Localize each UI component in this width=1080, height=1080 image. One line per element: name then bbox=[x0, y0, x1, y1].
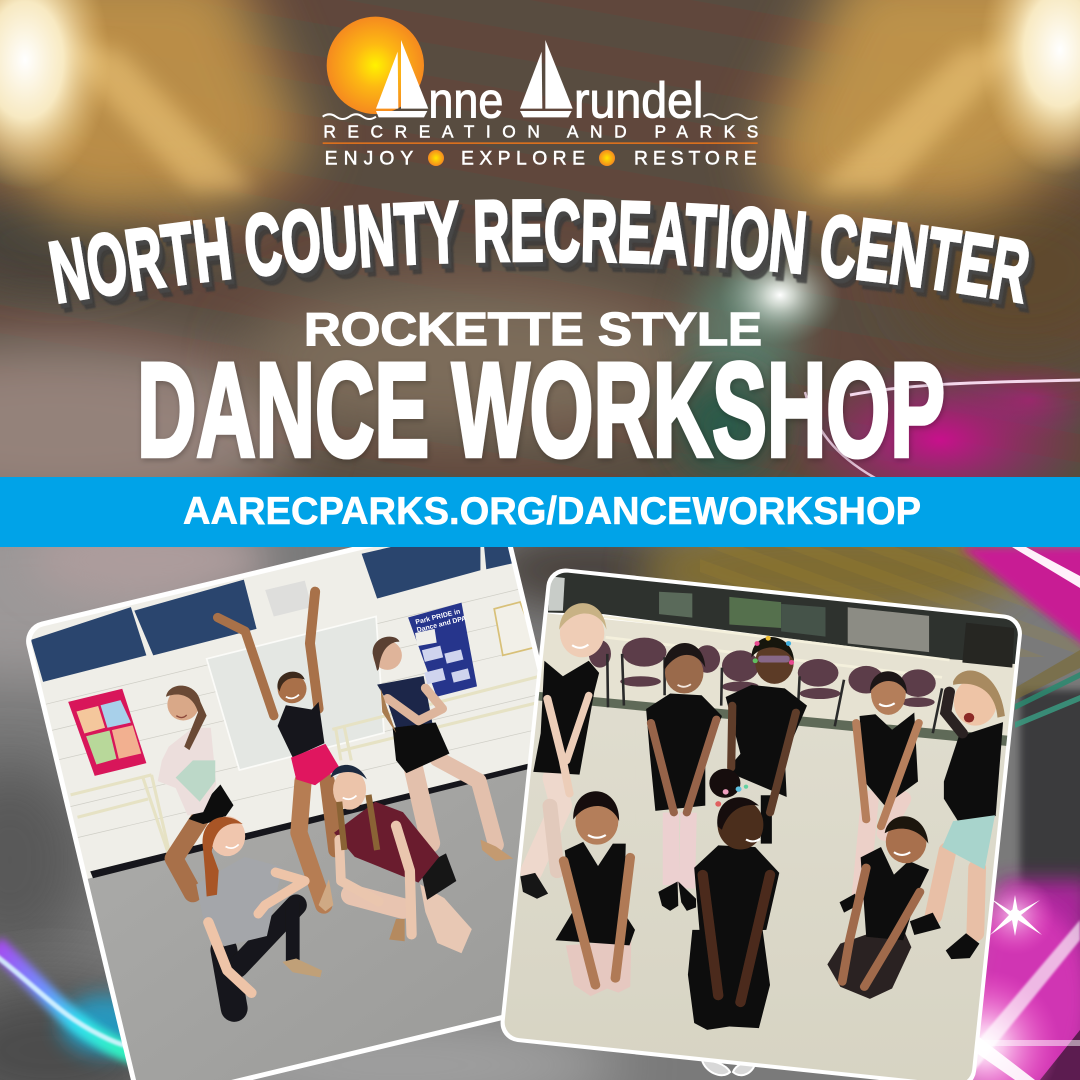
URL banner bbox=[0, 477, 1080, 547]
dancer: front left in grey shirt bbox=[196, 816, 322, 1008]
dancer: right in navy top bbox=[373, 637, 513, 861]
room floor bbox=[504, 692, 1006, 1080]
poster: formations bbox=[68, 689, 146, 776]
window band bbox=[548, 572, 1018, 664]
subheading: rockette style: ROCKETTE STYLE bbox=[304, 303, 762, 355]
background: upper stage lights bbox=[0, 0, 1080, 520]
cream wall bbox=[540, 614, 1015, 678]
logo waves bbox=[323, 114, 757, 119]
rainbow ray accent bbox=[1015, 650, 1080, 728]
logo tagline: EXPLORE bbox=[461, 149, 585, 170]
kid: second back row bbox=[646, 643, 722, 911]
logo tagline: RESTORE bbox=[634, 149, 757, 170]
kid: third back row with beads bbox=[726, 636, 807, 844]
logo subtitle: RECREATION AND PARKS bbox=[323, 121, 758, 141]
logo wordmark: nne bbox=[428, 72, 503, 128]
icon: rainbow light ribbon bbox=[0, 945, 150, 1058]
icon: lens flare bbox=[972, 920, 1080, 1080]
kid: front centre kneeling bbox=[688, 769, 779, 1030]
notice board bbox=[494, 602, 537, 655]
kid: front right kneeling bbox=[827, 816, 929, 999]
kid: front left kneeling bbox=[555, 791, 635, 996]
poster: park pride bbox=[408, 603, 477, 697]
icon: sparkle bbox=[990, 879, 1048, 948]
logo tagline: ENJOY bbox=[325, 149, 413, 170]
kid: blond at left bbox=[520, 603, 607, 899]
logo sailboat two bbox=[520, 40, 573, 117]
projector bbox=[265, 581, 312, 616]
background: lower stage lights bbox=[0, 500, 1080, 1080]
dancer: front right in maroon top bbox=[331, 765, 472, 953]
logo wordmark: rundel bbox=[574, 72, 703, 128]
navy acoustic panels bbox=[31, 547, 512, 682]
heading: centre name on an arc: NORTH COUNTY RECREATION CENTER bbox=[48, 198, 1036, 314]
logo: Anne Arundel Recreation and Parks bbox=[323, 17, 758, 170]
dancer: left in tie-dye top bbox=[158, 686, 234, 893]
logo sun bbox=[327, 17, 424, 114]
dancer: centre with raised arms bbox=[218, 592, 339, 911]
photo: teen dancers in studio bbox=[26, 547, 539, 1080]
chairs bbox=[589, 638, 942, 733]
logo sailboat one bbox=[376, 40, 428, 117]
studio floor bbox=[88, 770, 528, 1080]
icon: butterfly bbox=[702, 1060, 756, 1075]
poster: park pride: Dance and DPA bbox=[416, 615, 467, 634]
logo tagline bbox=[325, 149, 757, 170]
barres bbox=[604, 617, 949, 677]
logo wordmark bbox=[428, 72, 703, 128]
poster: park pride: Park PRIDE in bbox=[415, 608, 461, 626]
ballet barres bbox=[70, 676, 537, 853]
kid: fourth back row bbox=[840, 671, 919, 913]
banner URL text: AARECPARKS.ORG/DANCEWORKSHOP bbox=[183, 490, 921, 533]
photo: younger dancers group bbox=[500, 568, 1022, 1080]
whiteboard bbox=[207, 616, 384, 770]
studio wall bbox=[31, 547, 538, 879]
kid: right with mint skirt bbox=[910, 670, 1005, 959]
